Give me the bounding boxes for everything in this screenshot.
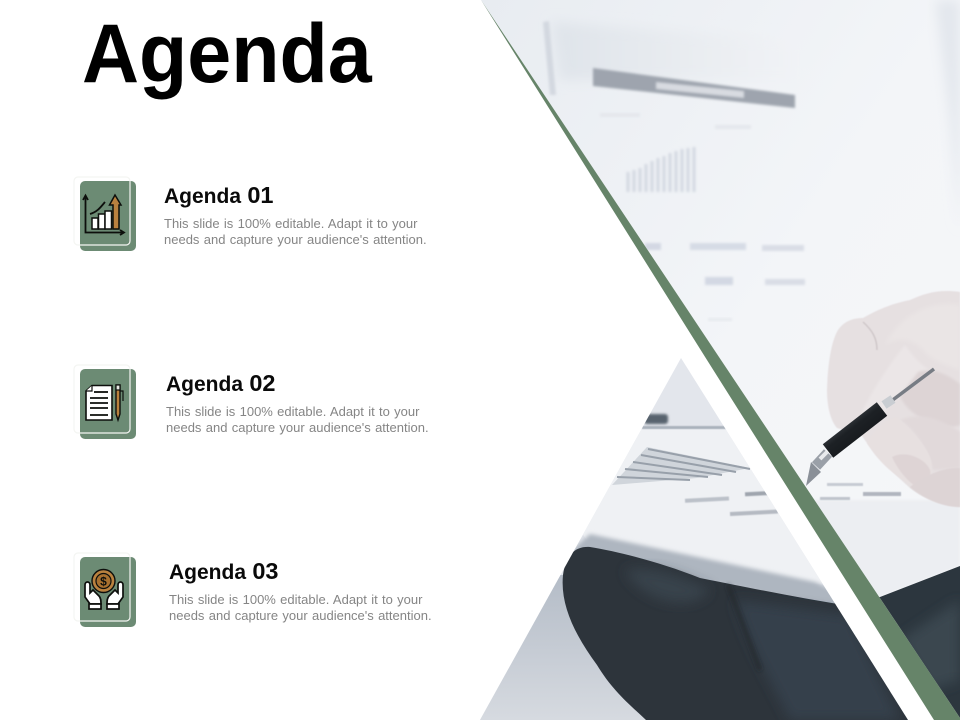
hand (827, 291, 960, 507)
photo panel: upper right (480, 0, 960, 720)
icon: hands holding coin (74, 552, 136, 627)
agenda item 02: This slide is 100% editable. Adapt it to your (166, 404, 419, 419)
agenda item 02: needs and capture your audience's attention. (166, 420, 429, 435)
diagonal green band (481, 0, 960, 720)
icon: hands holding coin: $ (100, 574, 107, 588)
agenda item 03 (169, 558, 432, 623)
agenda item 01 (164, 182, 427, 247)
photo: hand with pen over documents (480, 0, 960, 720)
pen (806, 369, 934, 486)
agenda item 01: Agenda 01 (164, 182, 273, 208)
agenda item 01: needs and capture your audience's attention. (164, 232, 427, 247)
agenda item 02: Agenda 02 (166, 370, 275, 396)
agenda item 02 (166, 370, 429, 435)
icon: document and pen (74, 364, 136, 439)
agenda item 03: This slide is 100% editable. Adapt it to your (169, 592, 422, 607)
icon: growth chart (74, 176, 136, 251)
photo panel: lower triangle (480, 358, 908, 720)
agenda item 03: needs and capture your audience's attention. (169, 608, 432, 623)
agenda item 01: This slide is 100% editable. Adapt it to your (164, 216, 417, 231)
title: Agenda (82, 6, 372, 100)
agenda item 03: Agenda 03 (169, 558, 278, 584)
